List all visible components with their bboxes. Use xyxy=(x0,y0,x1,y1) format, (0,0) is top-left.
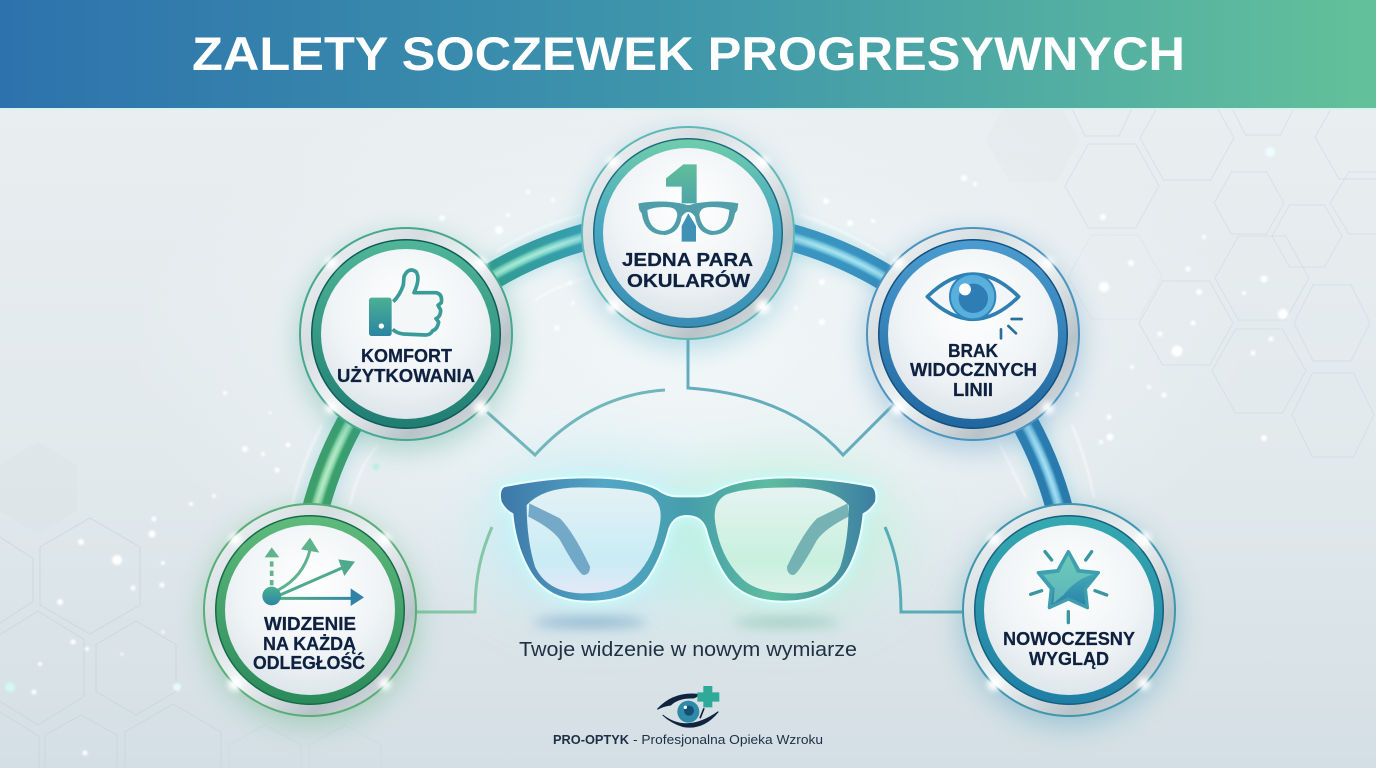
icon: eye xyxy=(927,274,1022,338)
icon: arrows to different distances xyxy=(262,538,364,606)
glasses frame glow xyxy=(501,478,875,601)
label: LINII xyxy=(953,380,993,400)
label: WIDZENIE xyxy=(264,614,356,634)
badge: brak widocznych linii xyxy=(865,227,1081,450)
sparkles xyxy=(5,147,1288,756)
icon: star xyxy=(1031,552,1107,623)
label xyxy=(337,346,475,386)
label: WYGLĄD xyxy=(1029,649,1109,669)
badge: jedna para okularów xyxy=(580,126,796,349)
label: BRAK xyxy=(948,341,998,361)
background hexagon pattern: top right xyxy=(986,64,1376,457)
footer brand text: - Profesjonalna Opieka Wzroku xyxy=(633,733,823,747)
central glasses xyxy=(501,478,875,627)
tagline: Twoje widzenie w nowym wymiarze xyxy=(519,639,857,661)
label: NA KAŻDĄ xyxy=(263,634,356,654)
label: ODLEGŁOŚĆ xyxy=(253,652,365,673)
title: ZALETY SOCZEWEK PROGRESYWNYCH xyxy=(192,27,1185,80)
header band xyxy=(0,0,1376,110)
glasses frame white rim xyxy=(501,478,875,601)
label xyxy=(622,250,753,291)
glow arcs beside the band xyxy=(292,215,1094,505)
logo: eye with plus xyxy=(657,686,719,727)
label: NOWOCZESNY xyxy=(1003,629,1135,649)
icon: thumbs up xyxy=(369,270,442,336)
label: WIDOCZNYCH xyxy=(910,360,1037,380)
label xyxy=(910,341,1037,400)
footer brand text: PRO-OPTYK xyxy=(553,733,629,747)
label xyxy=(1003,629,1135,669)
badge: komfort użytkowania xyxy=(298,227,514,450)
badge: widzenie na każdą odległość xyxy=(202,503,418,726)
shadow: glasses xyxy=(533,618,840,627)
connector lines to the glasses xyxy=(417,340,962,612)
icon: number one with glasses xyxy=(638,164,738,242)
central glow behind glasses xyxy=(480,460,900,610)
label xyxy=(253,614,365,673)
lenses xyxy=(527,487,849,593)
label: UŻYTKOWANIA xyxy=(337,366,475,386)
frame xyxy=(501,478,875,601)
temples xyxy=(528,503,849,575)
label: JEDNA PARA xyxy=(622,250,753,270)
label: OKULARÓW xyxy=(627,270,750,291)
label: KOMFORT xyxy=(361,346,452,366)
connecting arc xyxy=(292,215,1094,530)
badge: nowoczesny wygląd xyxy=(961,503,1177,726)
background hexagon pattern: bottom left xyxy=(0,442,381,768)
